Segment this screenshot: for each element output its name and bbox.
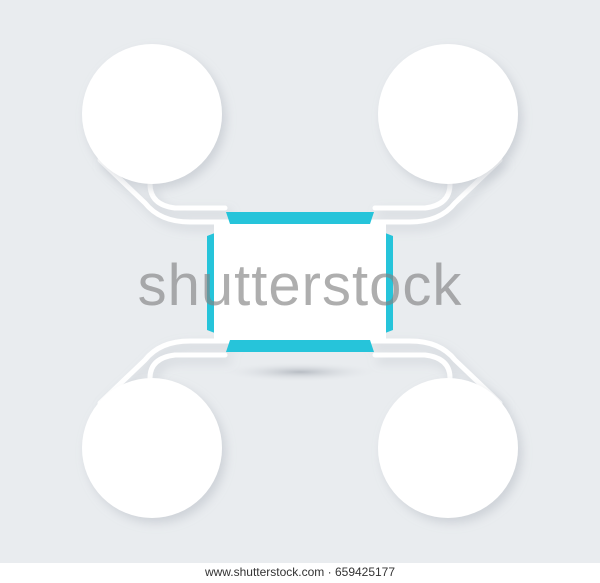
center frame xyxy=(207,212,393,352)
center shadow xyxy=(220,362,380,382)
circle: top-right xyxy=(378,44,518,184)
connectors xyxy=(100,160,500,403)
circle: bottom-right xyxy=(378,378,518,518)
circle: bottom-left xyxy=(82,378,222,518)
circle: top-left xyxy=(82,44,222,184)
watermark: shutterstock xyxy=(138,253,462,318)
footer: www.shutterstock.com · 659425177 xyxy=(205,565,395,579)
